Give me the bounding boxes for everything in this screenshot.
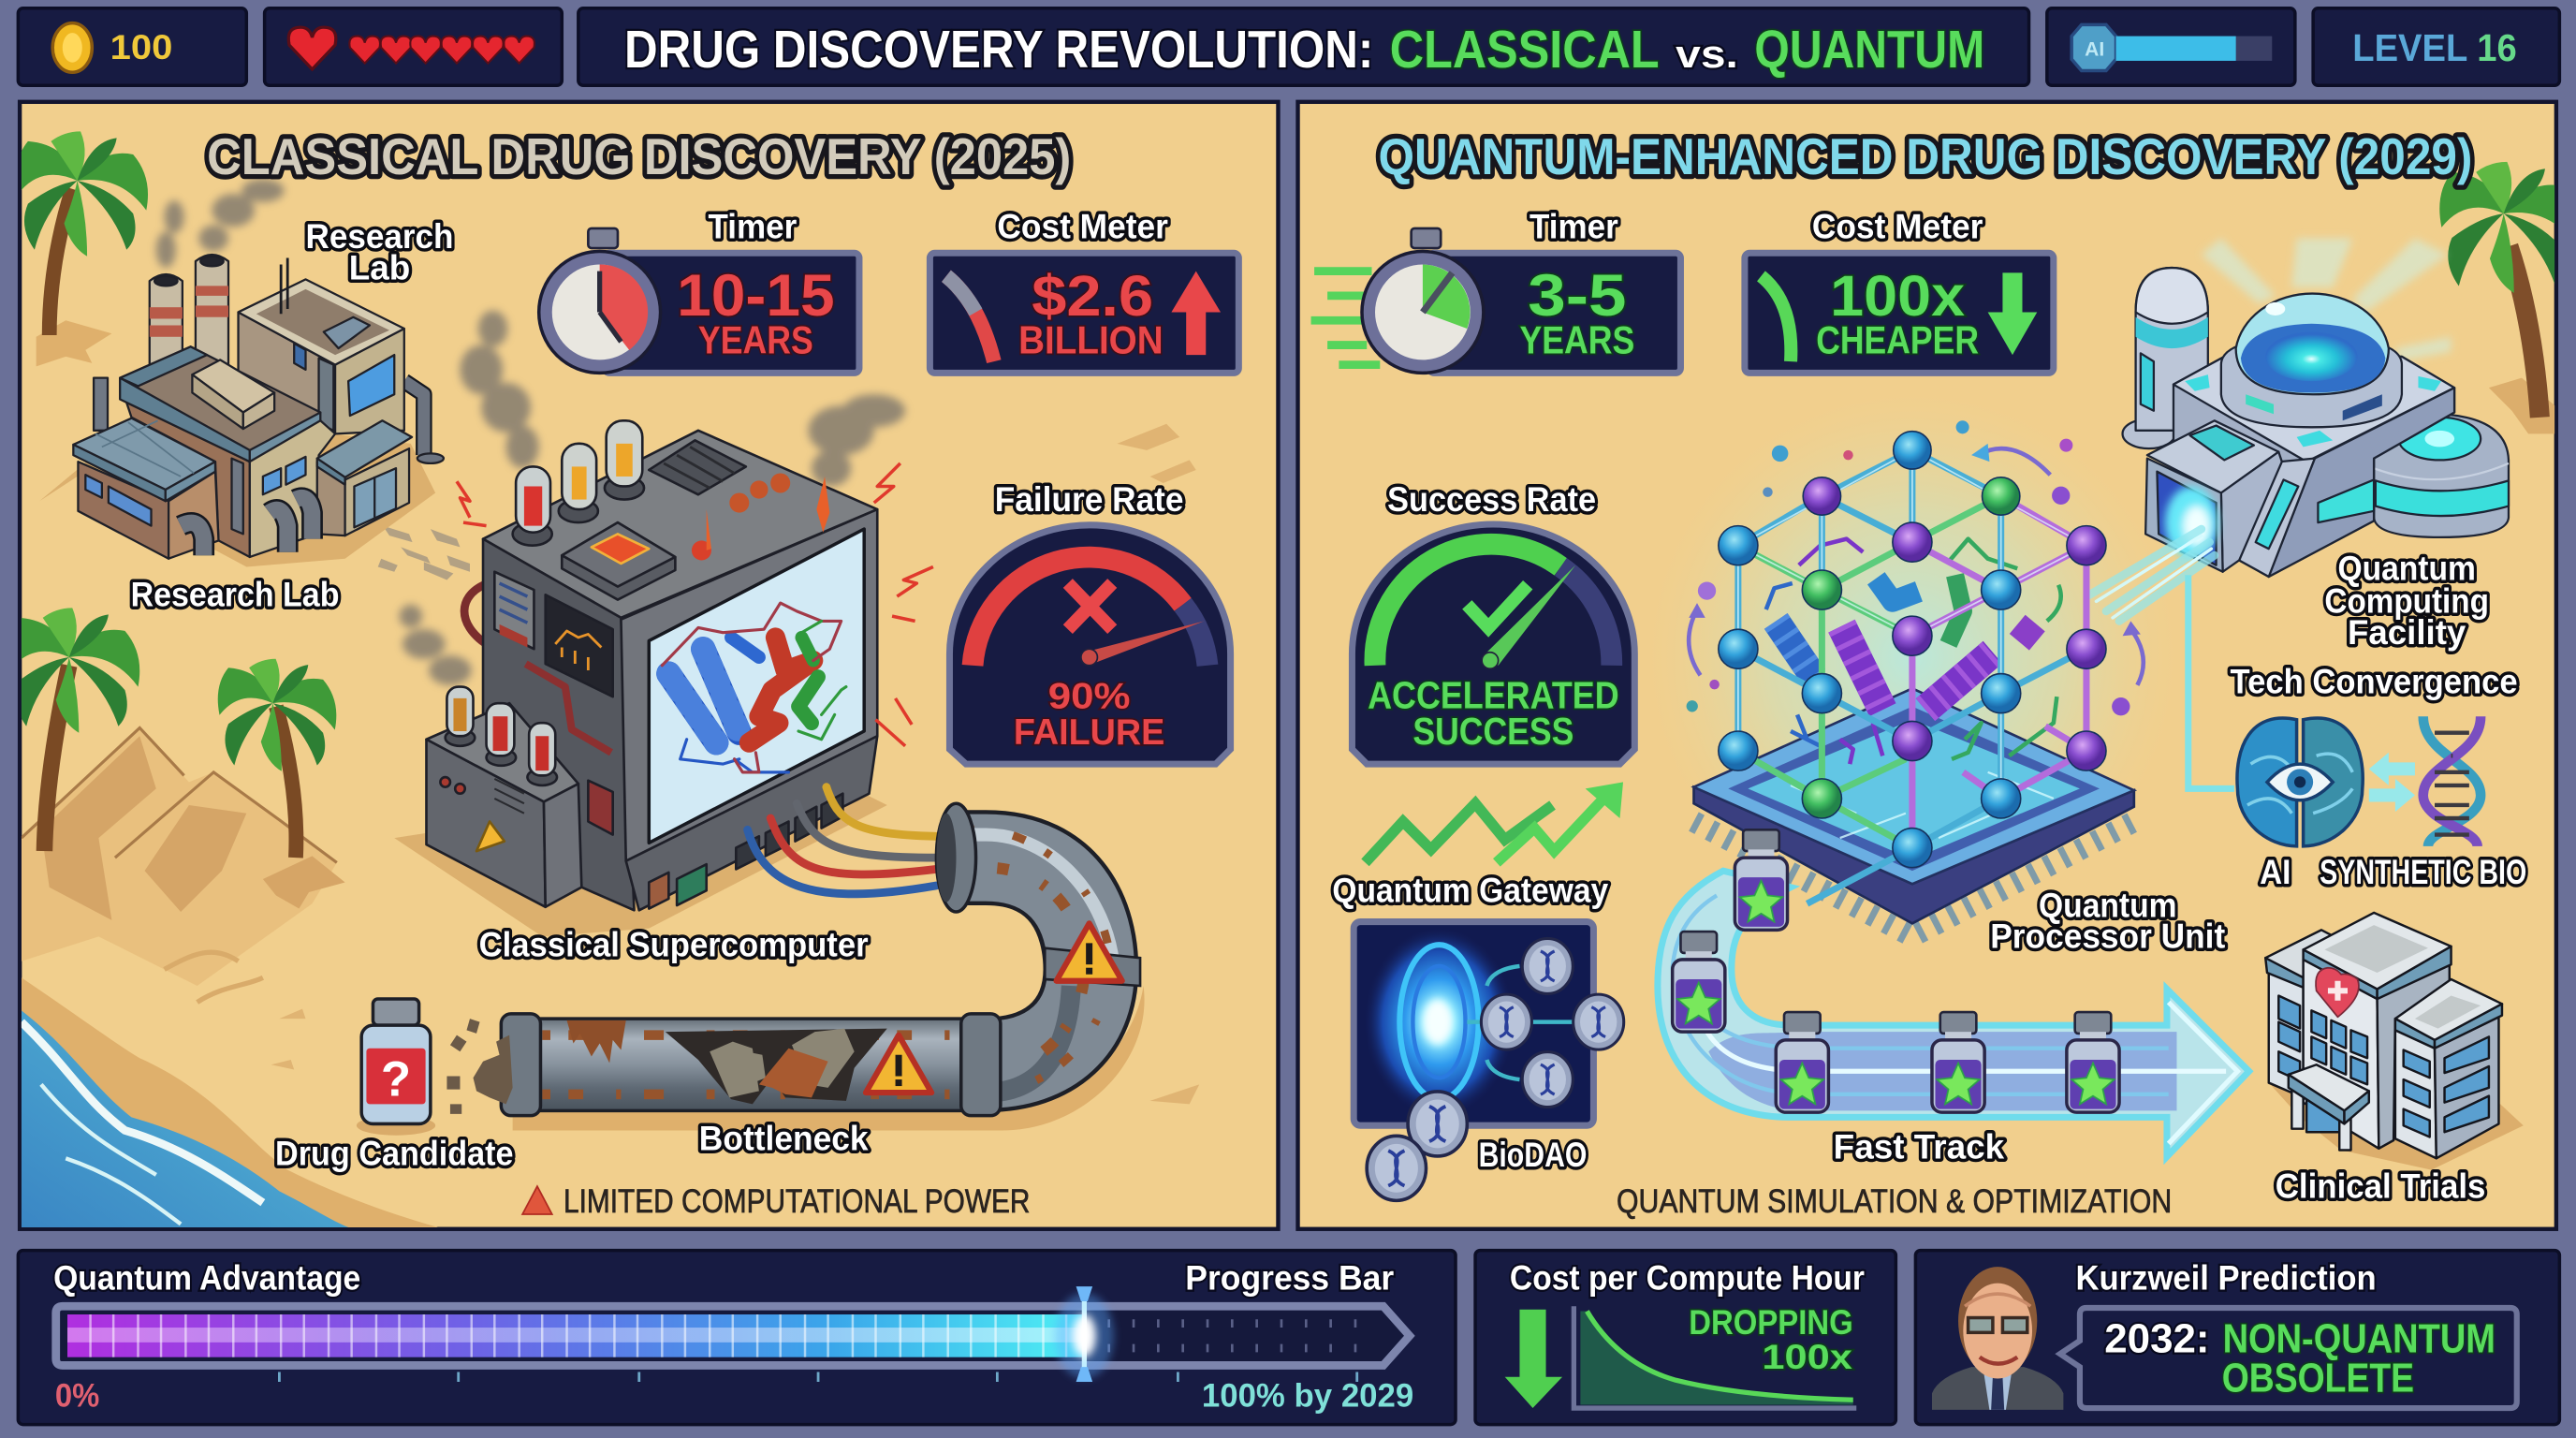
speech bubble bbox=[2060, 1308, 2517, 1408]
door hood bbox=[2147, 420, 2278, 493]
years text: 10-15 bbox=[677, 263, 835, 329]
pipe right bbox=[404, 381, 424, 455]
smoke plumes bbox=[156, 179, 905, 685]
label: research lab top: Research bbox=[305, 217, 453, 256]
label: timer: Timer bbox=[708, 207, 797, 245]
progress marker bbox=[1055, 1286, 1114, 1382]
panel: coin counter bbox=[18, 8, 246, 85]
mid roof bbox=[120, 346, 320, 462]
top HUD bar bbox=[18, 8, 2559, 85]
title: vs. bbox=[1676, 32, 1738, 76]
needle bbox=[1482, 565, 1575, 668]
panel: AI energy bar: AI bbox=[2085, 39, 2104, 61]
icon: fast track arrow bbox=[1658, 871, 2249, 1157]
success text: ACCELERATED bbox=[1368, 673, 1619, 716]
quantum lattice glow bbox=[1649, 394, 2175, 920]
side panels bbox=[494, 572, 534, 649]
years text: 3-5 bbox=[1528, 263, 1627, 329]
left silo bbox=[2123, 419, 2175, 448]
label: clinical trials: Clinical Trials bbox=[2276, 1167, 2485, 1205]
gauge arc bbox=[973, 557, 1208, 666]
right wing bbox=[2374, 414, 2509, 537]
portal swirl bbox=[1364, 927, 1515, 1117]
speech bubble: 2032: bbox=[2104, 1315, 2210, 1361]
lattice nodes bbox=[1719, 432, 2106, 868]
icon: door glow bbox=[2165, 486, 2217, 559]
timer widget quantum: YEARS bbox=[1519, 317, 1634, 361]
icon: check mark bbox=[1467, 585, 1528, 627]
base bbox=[626, 736, 877, 910]
dome ring bbox=[2221, 337, 2402, 427]
heading: quantum: QUANTUM-ENHANCED DRUG DISCOVERY (2029) bbox=[1379, 128, 2472, 185]
cost text: 100x bbox=[1830, 264, 1965, 329]
icon: quantum processor chip bbox=[1693, 688, 2134, 936]
label: ai: AI bbox=[2260, 853, 2291, 891]
progress track bbox=[56, 1306, 1410, 1365]
canopy bbox=[2306, 1093, 2343, 1132]
cost meter quantum bbox=[1745, 207, 2054, 373]
beach and ocean bbox=[22, 977, 444, 1229]
label: bottleneck: Bottleneck bbox=[699, 1120, 869, 1158]
icon: portrait bbox=[1932, 1267, 2063, 1410]
label: kurzweil prediction: Kurzweil Prediction bbox=[2076, 1259, 2377, 1298]
label: 0 percent: 0% bbox=[55, 1377, 99, 1414]
top face bbox=[483, 431, 877, 618]
icon: stopwatch bbox=[1362, 228, 1484, 373]
palm: upper left bbox=[16, 131, 148, 366]
label: tech convergence: Tech Convergence bbox=[2231, 663, 2518, 701]
monitor frame bbox=[621, 509, 877, 861]
icon: ai brain bbox=[2237, 718, 2363, 846]
icon: drug candidate vial bbox=[357, 999, 435, 1136]
overheating sparks bbox=[692, 473, 829, 560]
timer widget classical: YEARS bbox=[698, 317, 813, 361]
light rays from dome bbox=[2202, 238, 2452, 361]
icon: down arrow bbox=[1988, 272, 2037, 355]
back wing bbox=[2269, 973, 2304, 1097]
needle bbox=[1081, 621, 1204, 666]
note: quantum simulation and optimization: QUANTUM SIMULATION & OPTIMIZATION bbox=[1617, 1183, 2172, 1220]
thin vent bbox=[94, 378, 108, 431]
red hose bbox=[464, 583, 488, 644]
tower bbox=[237, 311, 320, 410]
label: quantum processor unit: Processor Unit bbox=[1990, 917, 2225, 956]
label: biodao: BioDAO bbox=[1479, 1136, 1587, 1174]
label: cost per compute hour: Cost per Compute Hour bbox=[1510, 1259, 1865, 1298]
label: progress bar: Progress Bar bbox=[1185, 1259, 1394, 1298]
icon: cost arc bbox=[1761, 276, 1791, 361]
icon: cost arc bbox=[946, 276, 994, 361]
icon: research lab building bbox=[39, 255, 444, 566]
icon: drug candidate vial: ? bbox=[381, 1052, 411, 1108]
timer widget classical bbox=[539, 207, 859, 373]
pipes bbox=[181, 522, 204, 555]
label: cost meter: Cost Meter bbox=[1812, 207, 1983, 245]
palm: dune bbox=[218, 659, 345, 909]
label: quantum computing facility: Quantum bbox=[2337, 550, 2476, 588]
screen bbox=[649, 529, 864, 843]
left face bbox=[483, 539, 634, 910]
back brown wall bbox=[126, 403, 250, 557]
panel: quantum-enhanced drug discovery bbox=[1298, 102, 2576, 1229]
label: quantum processor unit: Quantum bbox=[2039, 886, 2176, 924]
icon: x mark bbox=[1068, 583, 1112, 629]
chimneys bbox=[148, 273, 183, 364]
hot board bbox=[562, 522, 675, 600]
success rate gauge bbox=[1352, 480, 1634, 764]
panel: quantum advantage progress bar bbox=[18, 1251, 1456, 1425]
icon: convergence arrows bbox=[2369, 753, 2415, 812]
lattice edges bbox=[1738, 450, 2086, 903]
protein coils bbox=[1766, 539, 2061, 764]
protein on screen bbox=[662, 603, 846, 772]
label: cost meter: Cost Meter bbox=[997, 207, 1168, 245]
cost text: $2.6 bbox=[1032, 264, 1153, 329]
label: quantum computing facility: Computing bbox=[2324, 582, 2489, 621]
left wing bbox=[78, 462, 168, 559]
failure rate gauge: FAILURE bbox=[1014, 712, 1164, 753]
label: failure rate: Failure Rate bbox=[995, 480, 1184, 519]
icon: ribbon cables bbox=[748, 787, 936, 894]
panel: biodao portal bbox=[1354, 922, 1624, 1200]
note: limited computational power: LIMITED COMPUTATIONAL POWER bbox=[564, 1183, 1030, 1220]
palm trees bbox=[8, 131, 345, 909]
icon: drug vials bbox=[1673, 829, 2119, 1112]
failure text: 90% bbox=[1048, 676, 1131, 716]
label: drug candidate: Drug Candidate bbox=[275, 1134, 514, 1172]
main block bbox=[2174, 357, 2454, 577]
title: CLASSICAL bbox=[1390, 20, 1660, 79]
icon: big heart bbox=[288, 27, 336, 69]
icon: token coins bbox=[1367, 938, 1624, 1200]
label: 100 percent by 2029: 100% by 2029 bbox=[1202, 1377, 1413, 1414]
icon: classical supercomputer bbox=[394, 420, 933, 936]
label: success rate: Success Rate bbox=[1387, 480, 1596, 519]
icon: quantum gateway zigzag bbox=[1365, 782, 1623, 862]
scale ticks bbox=[279, 1372, 1357, 1382]
icon: up arrow bbox=[1171, 271, 1221, 355]
panel: cost per compute hour bbox=[1475, 1251, 1895, 1425]
floating particles bbox=[1687, 420, 2144, 715]
sand dunes bbox=[22, 424, 1199, 1104]
icon: beam to processor bbox=[2089, 529, 2215, 621]
red conduit bbox=[526, 664, 611, 753]
tan wall bbox=[250, 420, 335, 557]
annex bbox=[2395, 1030, 2437, 1158]
label: timer: Timer bbox=[1530, 207, 1618, 245]
dropping text: DROPPING bbox=[1689, 1303, 1853, 1342]
title bbox=[578, 8, 2029, 85]
cost meter classical: BILLION bbox=[1018, 317, 1164, 361]
label: quantum gateway: Quantum Gateway bbox=[1332, 872, 1609, 910]
label: quantum computing facility: Facility bbox=[2348, 613, 2466, 652]
label: fast track: Fast Track bbox=[1834, 1127, 2005, 1166]
panel: level bbox=[2313, 8, 2559, 85]
icon: down arrow bbox=[1505, 1310, 1562, 1408]
vacuum tubes bbox=[513, 420, 644, 546]
scorch tracks on sand bbox=[378, 526, 470, 580]
icon: small hearts bbox=[349, 37, 534, 64]
title: DRUG DISCOVERY REVOLUTION: bbox=[624, 20, 1373, 79]
main tower bbox=[2304, 960, 2378, 1149]
icon: rusty pipeline bottleneck bbox=[446, 803, 1145, 1130]
icon: stopwatch bbox=[539, 228, 661, 373]
icon: clinical trials hospital bbox=[2265, 913, 2524, 1170]
heart sign bbox=[2316, 968, 2359, 1017]
palm: mid left bbox=[8, 608, 139, 851]
title: QUANTUM bbox=[1754, 20, 1984, 79]
cost meter classical bbox=[929, 207, 1238, 373]
vent bbox=[649, 440, 746, 494]
speech bubble: OBSOLETE bbox=[2222, 1356, 2414, 1401]
icon: quantum computing facility bbox=[2123, 268, 2509, 577]
icon: synthetic bio dna bbox=[2423, 716, 2481, 846]
glass dome bbox=[2236, 294, 2389, 394]
cost meter quantum: CHEAPER bbox=[1816, 317, 1979, 361]
crack in the pipe bbox=[666, 1029, 887, 1104]
speech bubble: NON-QUANTUM bbox=[2223, 1315, 2496, 1361]
success rate gauge: SUCCESS bbox=[1412, 710, 1573, 753]
label: classical supercomputer: Classical Supercomputer bbox=[479, 925, 869, 963]
panel: AI energy bar bbox=[2047, 8, 2295, 85]
icon: coin bbox=[52, 23, 92, 72]
panel: hearts bbox=[265, 8, 562, 85]
panel: level: LEVEL 16 bbox=[2352, 26, 2517, 69]
gauge arc bbox=[1375, 544, 1612, 666]
palm tree right bbox=[2439, 162, 2576, 433]
label: quantum advantage: Quantum Advantage bbox=[53, 1259, 360, 1298]
icon: speed lines bbox=[1311, 271, 1380, 365]
panel: classical drug discovery bbox=[8, 102, 1278, 1229]
timer widget quantum bbox=[1311, 207, 1680, 373]
failure rate gauge bbox=[949, 480, 1231, 764]
panel: cost per compute hour: 100x bbox=[1762, 1338, 1852, 1376]
label: research lab top: Lab bbox=[349, 248, 410, 286]
small tubes bbox=[446, 687, 557, 785]
chart: falling cost curve bbox=[1573, 1306, 1856, 1408]
icon: qubit lattice bbox=[1687, 420, 2144, 903]
heading: classical: CLASSICAL DRUG DISCOVERY (2025) bbox=[207, 128, 1071, 185]
lower cabinet bbox=[426, 703, 578, 801]
annex bbox=[317, 462, 345, 536]
label: research lab: Research Lab bbox=[131, 576, 339, 614]
coin count: 100 bbox=[110, 28, 172, 66]
panel: kurzweil prediction bbox=[1915, 1251, 2559, 1425]
connector to tech convergence bbox=[2188, 575, 2234, 788]
